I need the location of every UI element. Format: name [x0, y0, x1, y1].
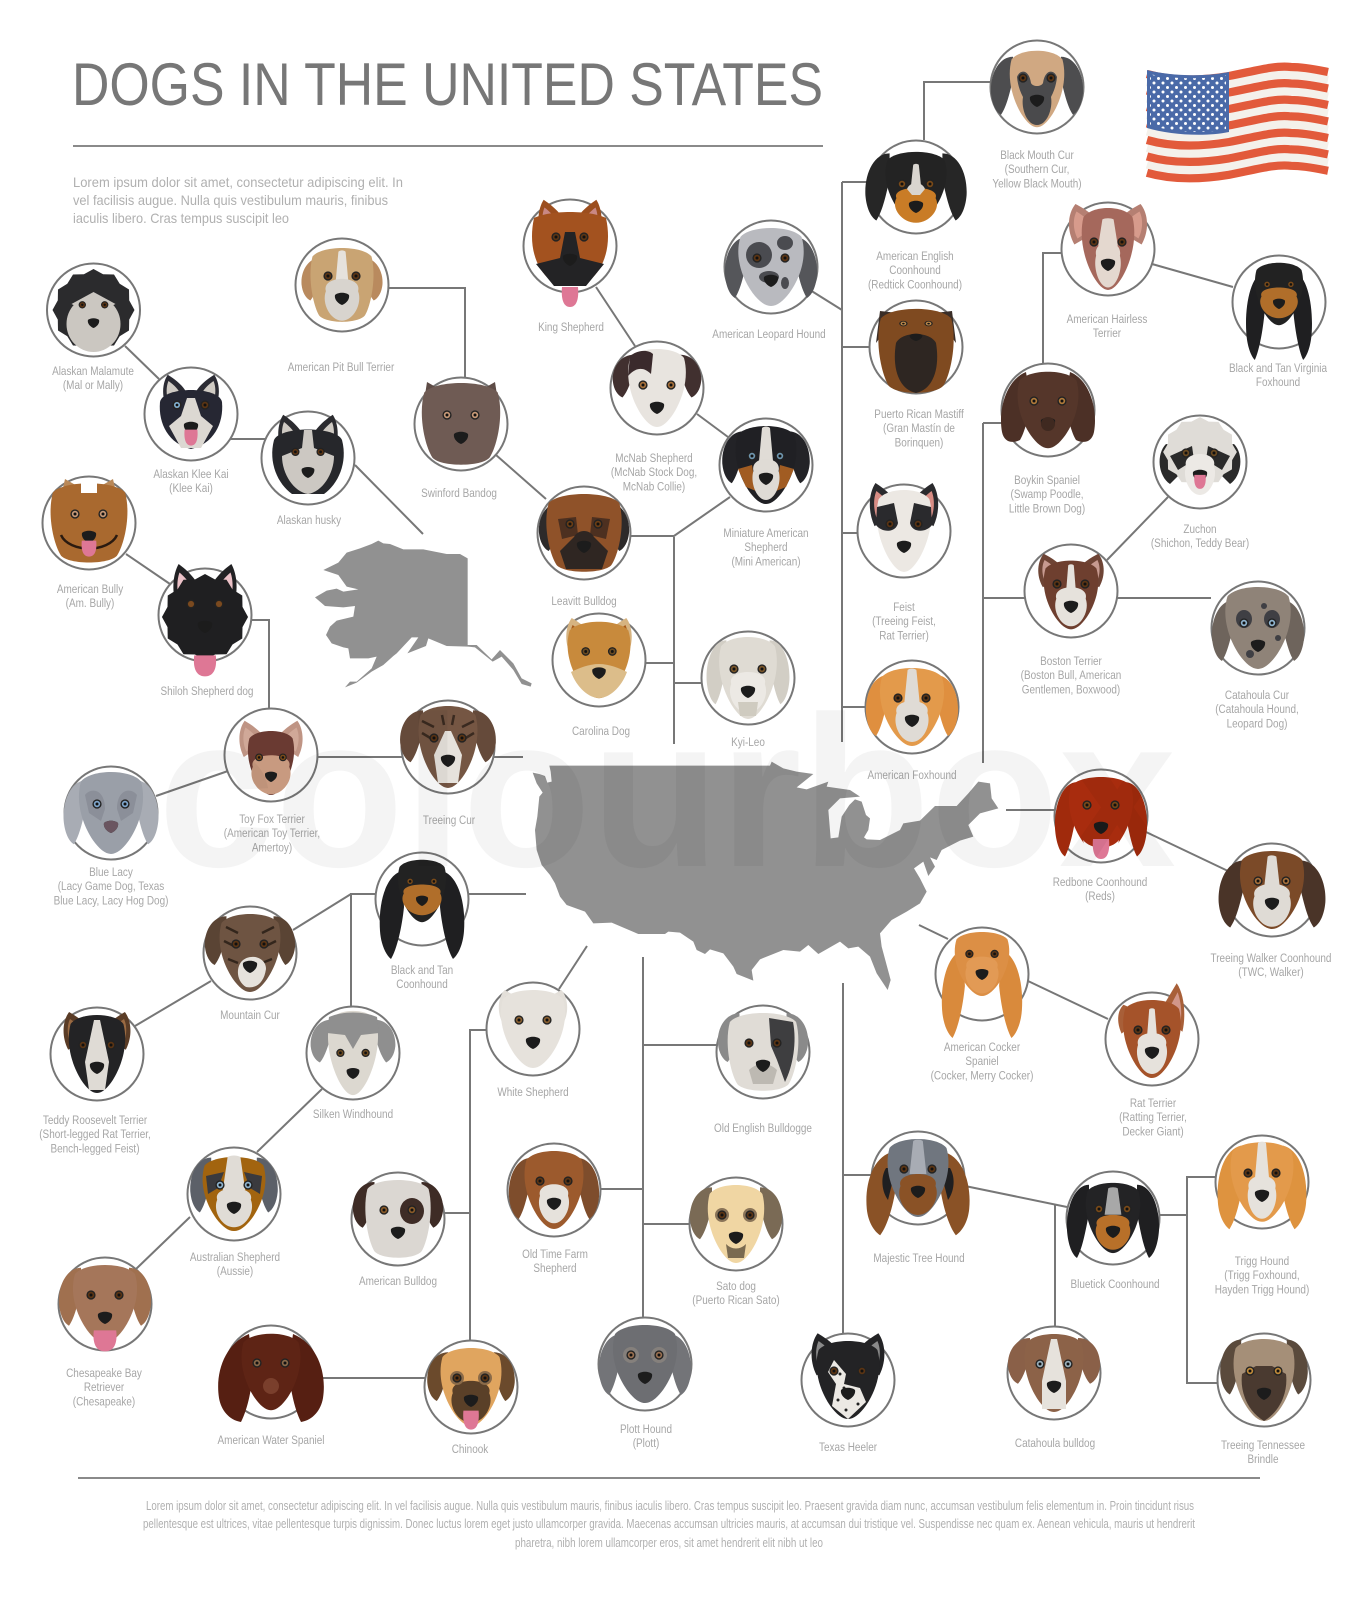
icon: Silken Windhound: [306, 1006, 400, 1100]
label: Chinook: [452, 1443, 489, 1456]
label: (Am. Bully): [66, 597, 114, 610]
dog: Black and Tan Virginia Foxhound: [1229, 256, 1328, 389]
intro text: vel facilisis augue. Nulla quis vestibulum mauris, finibus: [73, 192, 388, 208]
icon: Plott Hound: [598, 1318, 692, 1410]
dog: American Hairless Terrier: [1062, 202, 1154, 340]
icon: Miniature American Shepherd: [720, 418, 812, 512]
dog: Mountain Cur: [204, 906, 296, 1022]
label: Black and Tan: [391, 964, 453, 977]
label: Swinford Bandog: [421, 487, 497, 500]
label: American Bully: [57, 583, 124, 596]
label: Bluetick Coonhound: [1070, 1278, 1160, 1291]
label: Retriever: [84, 1381, 124, 1394]
icon: Blue Lacy: [64, 766, 158, 860]
dog: Black Mouth Cur: [990, 40, 1084, 191]
label: Blue Lacy: [89, 866, 133, 879]
icon: American Foxhound: [866, 660, 958, 754]
icon: Puerto Rican Mastiff: [870, 300, 962, 394]
icon: Chesapeake Bay Retriever: [58, 1258, 152, 1351]
icon: Alaskan husky: [262, 412, 354, 504]
icon: Leavitt Bulldog: [538, 486, 630, 580]
watermark: colourbox: [158, 671, 1176, 912]
label: (Klee Kai): [169, 482, 213, 495]
dog: Boston Terrier: [1021, 544, 1121, 697]
icon: Treeing Tennessee Brindle: [1218, 1334, 1310, 1426]
label: Rat Terrier): [879, 630, 929, 643]
dog: Sato dog: [690, 1178, 782, 1307]
label: (Trigg Foxhound,: [1224, 1269, 1300, 1282]
dog: Chesapeake Bay Retriever: [58, 1258, 152, 1409]
icon: American Pit Bull Terrier: [296, 238, 388, 332]
label: Toy Fox Terrier: [239, 813, 305, 826]
dog: Plott Hound: [598, 1318, 692, 1450]
label: (Mini American): [731, 556, 801, 569]
icon: Sato dog: [690, 1178, 782, 1270]
label: (Ratting Terrier,: [1119, 1111, 1187, 1124]
icon: American Bully: [42, 476, 136, 570]
label: Treeing Cur: [423, 814, 475, 827]
label: Feist: [893, 601, 915, 614]
label: (Boston Bull, American: [1021, 669, 1121, 682]
label: Texas Heeler: [819, 1441, 877, 1454]
label: (Southern Cur,: [1005, 163, 1069, 176]
label: (American Toy Terrier,: [224, 827, 320, 840]
map: Alaska: [315, 541, 532, 687]
icon: Black and Tan Coonhound: [376, 852, 468, 959]
label: Little Brown Dog): [1009, 503, 1085, 516]
dog: American Bully: [42, 476, 136, 610]
label: American Bulldog: [359, 1275, 437, 1288]
label: American English: [876, 250, 954, 263]
label: Black and Tan Virginia: [1229, 362, 1328, 375]
label: Rat Terrier: [1130, 1097, 1176, 1110]
label: Alaskan Klee Kai: [153, 468, 229, 481]
icon: Bluetick Coonhound: [1066, 1172, 1160, 1264]
dog: Bluetick Coonhound: [1066, 1172, 1160, 1291]
icon: Texas Heeler: [802, 1333, 894, 1426]
label: (Puerto Rican Sato): [692, 1294, 780, 1307]
label: Old Time Farm: [522, 1248, 588, 1261]
label: Alaskan Malamute: [52, 365, 134, 378]
footer text: [143, 1498, 1195, 1550]
icon: American Hairless Terrier: [1062, 202, 1154, 296]
dog: White Shepherd: [486, 982, 580, 1099]
label: Coonhound: [396, 978, 448, 991]
icon: Australian Shepherd: [188, 1148, 280, 1240]
icon: Boykin Spaniel: [1001, 364, 1095, 456]
label: Teddy Roosevelt Terrier: [43, 1114, 147, 1127]
intro text: iaculis libero. Cras tempus suscipit leo: [73, 210, 289, 226]
label: (McNab Stock Dog,: [611, 466, 697, 479]
label: Catahoula bulldog: [1015, 1437, 1095, 1450]
label: American Cocker: [944, 1041, 1020, 1054]
dog: Boykin Spaniel: [1001, 364, 1095, 516]
dog: Alaskan Klee Kai: [144, 368, 238, 495]
icon: Feist: [858, 483, 950, 578]
label: Black Mouth Cur: [1000, 149, 1074, 162]
intro text: Lorem ipsum dolor sit amet, consectetur adipiscing elit. In: [73, 174, 403, 190]
label: Alaskan husky: [277, 514, 342, 527]
label: (Lacy Game Dog, Texas: [58, 880, 165, 893]
dog: Treeing Tennessee Brindle: [1218, 1334, 1310, 1466]
dog: Shiloh Shepherd dog: [158, 564, 253, 698]
label: (Chesapeake): [73, 1396, 135, 1409]
dog: Trigg Hound: [1215, 1136, 1309, 1297]
connector lines: [125, 82, 1233, 1383]
dog: Toy Fox Terrier: [224, 708, 320, 855]
label: King Shepherd: [538, 321, 604, 334]
label: Terrier: [1093, 327, 1121, 340]
dog: Black and Tan Coonhound: [376, 852, 468, 991]
label: Miniature American: [723, 527, 809, 540]
dog: Rat Terrier: [1106, 983, 1198, 1139]
label: Gentlemen, Boxwood): [1022, 684, 1120, 697]
label: (Aussie): [217, 1265, 253, 1278]
label: Catahoula Cur: [1225, 689, 1289, 702]
icon: Black Mouth Cur: [990, 40, 1084, 134]
label: Brindle: [1248, 1453, 1278, 1466]
label: Plott Hound: [620, 1423, 672, 1436]
dog: Redbone Coonhound: [1053, 770, 1148, 903]
dog: Kyi-Leo: [702, 632, 794, 749]
dog: Treeing Walker Coonhound: [1211, 844, 1331, 979]
label: Redbone Coonhound: [1053, 876, 1147, 889]
dog: Old English Bulldogge: [714, 1006, 812, 1135]
icon: Alaskan Klee Kai: [144, 368, 238, 460]
dog: Catahoula Cur: [1212, 582, 1304, 731]
dog: Chinook: [424, 1340, 518, 1456]
label: Silken Windhound: [313, 1108, 393, 1121]
label: American Pit Bull Terrier: [288, 361, 395, 374]
label: Majestic Tree Hound: [873, 1252, 965, 1265]
icon: Redbone Coonhound: [1054, 770, 1148, 862]
dog: Silken Windhound: [306, 1006, 400, 1121]
dog: American Cocker Spaniel: [931, 928, 1033, 1083]
label: Mountain Cur: [220, 1009, 280, 1022]
label: Shepherd: [533, 1262, 577, 1275]
icon: Catahoula bulldog: [1008, 1326, 1100, 1420]
label: (Plott): [633, 1437, 659, 1450]
label: Sato dog: [716, 1280, 756, 1293]
icon: American Water Spaniel: [218, 1326, 324, 1422]
label: (Redtick Coonhound): [868, 279, 962, 292]
label: (Cocker, Merry Cocker): [931, 1070, 1033, 1083]
label: Spaniel: [965, 1055, 999, 1068]
icon: Chinook: [424, 1340, 518, 1434]
dog: Alaskan husky: [262, 412, 354, 527]
icon: Treeing Walker Coonhound: [1219, 844, 1325, 936]
dog: Australian Shepherd: [188, 1148, 280, 1278]
dog: Leavitt Bulldog: [538, 486, 630, 608]
icon: King Shepherd: [524, 200, 616, 307]
label: Leopard Dog): [1227, 718, 1287, 731]
dog: Old Time Farm Shepherd: [508, 1144, 600, 1275]
dog: American Foxhound: [866, 660, 958, 782]
label: McNab Collie): [623, 481, 685, 494]
label: American Leopard Hound: [712, 328, 826, 341]
icon: American English Coonhound: [865, 140, 967, 234]
label: Decker Giant): [1122, 1126, 1184, 1139]
dog: American Bulldog: [352, 1172, 444, 1288]
dog: Treeing Cur: [400, 700, 496, 827]
label: McNab Shepherd: [615, 452, 693, 465]
label: Shepherd: [744, 541, 788, 554]
icon: Shiloh Shepherd dog: [158, 564, 252, 676]
label: American Foxhound: [867, 769, 957, 782]
dog: King Shepherd: [524, 200, 616, 334]
map: contiguous United States: [533, 762, 998, 990]
label: Australian Shepherd: [190, 1251, 280, 1264]
label: American Water Spaniel: [218, 1434, 324, 1447]
label: White Shepherd: [497, 1086, 569, 1099]
label: (Catahoula Hound,: [1215, 703, 1299, 716]
dog: Miniature American Shepherd: [720, 418, 812, 569]
intro text: [73, 174, 403, 226]
footer text: pharetra, nibh lorem ullamcorper eros, sit amet hendrerit elit nibh ut leo: [515, 1535, 823, 1550]
dog: Carolina Dog: [552, 614, 646, 738]
dog: Teddy Roosevelt Terrier: [39, 1008, 151, 1156]
label: Zuchon: [1183, 523, 1217, 536]
icon: Boston Terrier: [1024, 544, 1118, 638]
icon: Alaskan Malamute: [47, 264, 140, 356]
label: (Swamp Poodle,: [1010, 488, 1084, 501]
label: (Mal or Mally): [63, 379, 123, 392]
label: Treeing Tennessee: [1221, 1439, 1305, 1452]
dog: Puerto Rican Mastiff: [870, 300, 965, 450]
label: Boykin Spaniel: [1014, 474, 1080, 487]
dog: American Water Spaniel: [218, 1326, 324, 1447]
title: DOGS IN THE UNITED STATES: [72, 51, 823, 118]
dog: Alaskan Malamute: [47, 264, 140, 392]
icon: American flag: [1147, 67, 1328, 178]
label: (Short-legged Rat Terrier,: [39, 1128, 151, 1141]
dog: Blue Lacy: [54, 766, 168, 908]
label: (Gran Mastín de: [883, 422, 955, 435]
icon: Treeing Cur: [400, 700, 496, 794]
label: Chesapeake Bay: [66, 1367, 142, 1380]
icon: American Cocker Spaniel: [936, 928, 1028, 1038]
icon: Mountain Cur: [204, 906, 296, 1000]
icon: Carolina Dog: [552, 614, 646, 706]
icon: Majestic Tree Hound: [866, 1132, 970, 1235]
label: Old English Bulldogge: [714, 1122, 812, 1135]
label: (Shichon, Teddy Bear): [1151, 537, 1249, 550]
dog: Zuchon: [1151, 416, 1249, 550]
icon: American Leopard Hound: [724, 220, 818, 314]
icon: White Shepherd: [486, 982, 580, 1076]
label: (Reds): [1085, 890, 1115, 903]
icon: Trigg Hound: [1216, 1136, 1308, 1229]
icon: Catahoula Cur: [1212, 582, 1304, 674]
dog: Majestic Tree Hound: [866, 1132, 970, 1265]
dog: Catahoula bulldog: [1008, 1326, 1100, 1450]
dog: Swinford Bandog: [414, 378, 508, 500]
label: (Treeing Feist,: [872, 615, 936, 628]
label: Trigg Hound: [1235, 1255, 1289, 1268]
label: Puerto Rican Mastiff: [874, 408, 965, 421]
label: Kyi-Leo: [731, 736, 765, 749]
label: Carolina Dog: [572, 725, 630, 738]
label: Amertoy): [252, 842, 292, 855]
icon: Swinford Bandog: [414, 378, 508, 470]
label: American Hairless: [1067, 313, 1148, 326]
icon: American Bulldog: [352, 1172, 444, 1266]
icon: McNab Shepherd: [610, 342, 704, 434]
icon: Zuchon: [1154, 416, 1246, 508]
label: Treeing Walker Coonhound: [1211, 952, 1331, 965]
label: Borinquen): [895, 437, 943, 450]
label: Coonhound: [889, 264, 941, 277]
icon: Teddy Roosevelt Terrier: [50, 1008, 144, 1100]
icon: Old Time Farm Shepherd: [508, 1144, 600, 1236]
label: Shiloh Shepherd dog: [161, 685, 253, 698]
dog: McNab Shepherd: [610, 342, 704, 494]
icon: Kyi-Leo: [702, 632, 794, 724]
dog: American English Coonhound: [865, 140, 967, 292]
label: Blue Lacy, Lacy Hog Dog): [54, 895, 168, 908]
label: Foxhound: [1256, 376, 1300, 389]
icon: Toy Fox Terrier: [224, 708, 318, 802]
label: Hayden Trigg Hound): [1215, 1284, 1309, 1297]
dog: American Pit Bull Terrier: [288, 238, 395, 374]
icon: Rat Terrier: [1106, 983, 1198, 1086]
icon: Black and Tan Virginia Foxhound: [1232, 256, 1326, 360]
icon: Old English Bulldogge: [716, 1006, 810, 1098]
label: Leavitt Bulldog: [551, 595, 617, 608]
label: (TWC, Walker): [1238, 966, 1304, 979]
dog: American Leopard Hound: [712, 220, 826, 341]
dog: Texas Heeler: [802, 1333, 894, 1454]
label: Boston Terrier: [1040, 655, 1102, 668]
dog: Feist: [858, 483, 950, 643]
label: Yellow Black Mouth): [992, 178, 1082, 191]
label: Bench-legged Feist): [50, 1143, 140, 1156]
